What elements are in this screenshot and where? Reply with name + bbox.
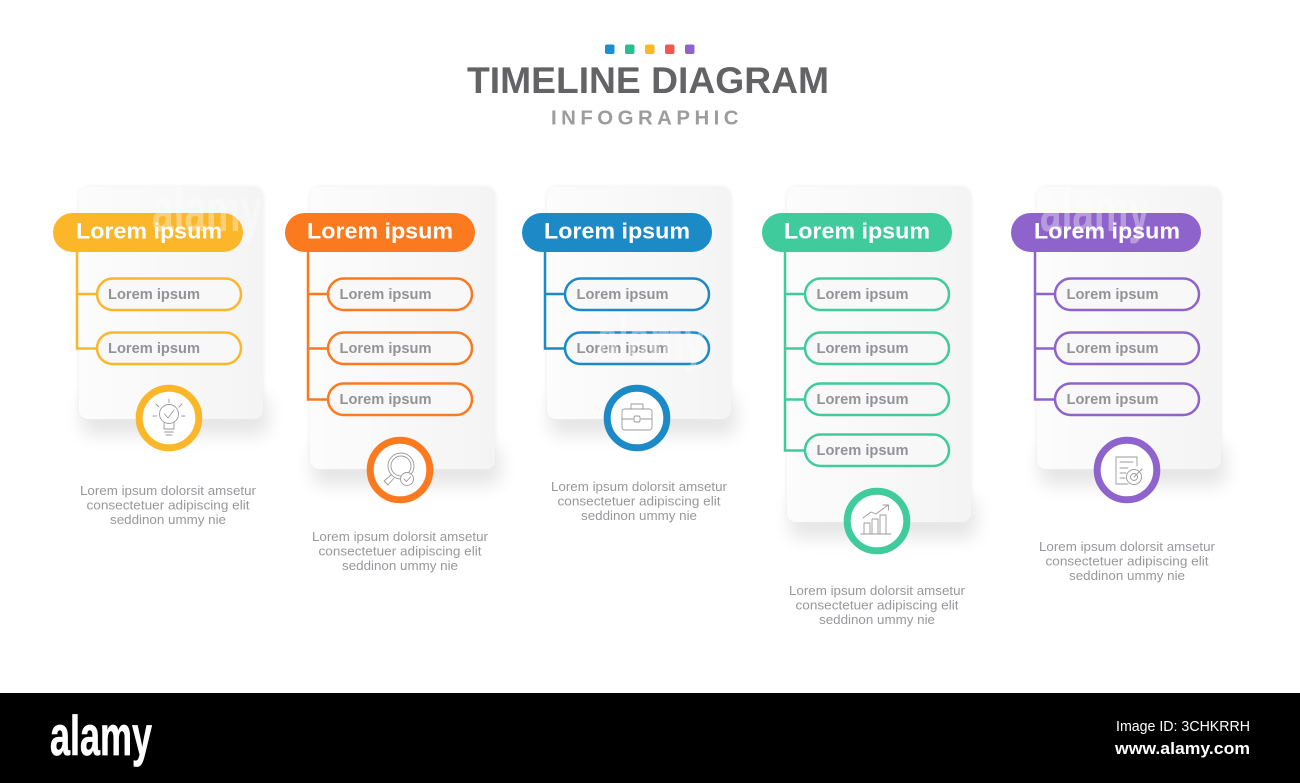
item 2.1: Lorem ipsum bbox=[340, 287, 432, 303]
item 5.1: Lorem ipsum bbox=[1066, 287, 1158, 303]
description 1: Lorem ipsum dolorsit amsetur bbox=[80, 484, 256, 498]
description 3: Lorem ipsum dolorsit amsetur bbox=[551, 480, 727, 494]
description 2: Lorem ipsum dolorsit amsetur bbox=[312, 530, 488, 544]
item 4.4: Lorem ipsum bbox=[816, 443, 908, 459]
header pill 2 bbox=[285, 213, 475, 252]
description 4 bbox=[789, 584, 965, 627]
connector 1 bbox=[77, 245, 98, 348]
description 3 bbox=[551, 480, 727, 523]
description 2 bbox=[312, 530, 488, 573]
icon: briefcase bbox=[607, 388, 667, 448]
header pill 4 bbox=[762, 213, 952, 252]
item 1.1: Lorem ipsum bbox=[108, 287, 200, 303]
panel: step 2 orange bbox=[285, 187, 500, 573]
item 4.3: Lorem ipsum bbox=[816, 392, 908, 408]
icon: growth chart bbox=[847, 491, 907, 551]
footer logo: alamy bbox=[50, 704, 152, 767]
card 5 bbox=[1037, 187, 1226, 485]
header pill 1 bbox=[53, 213, 243, 252]
connector 5 bbox=[1035, 245, 1056, 400]
connector 2 bbox=[308, 245, 329, 400]
header pill 1: Lorem ipsum bbox=[76, 218, 222, 244]
item 4.2 bbox=[805, 332, 949, 364]
description 5: consectetuer adipiscing elit bbox=[1046, 554, 1209, 568]
item 4.3 bbox=[805, 384, 949, 415]
connector 3 bbox=[545, 245, 566, 348]
image id: Image ID: 3CHKRRH bbox=[1116, 718, 1250, 735]
watermarks: alamy bbox=[597, 306, 705, 373]
item 1.1 bbox=[97, 278, 241, 310]
description 1: consectetuer adipiscing elit bbox=[86, 498, 250, 512]
description 1: seddinon ummy nie bbox=[110, 513, 226, 527]
panel: step 3 blue bbox=[522, 187, 736, 523]
description 4: seddinon ummy nie bbox=[819, 613, 935, 627]
description 3: seddinon ummy nie bbox=[581, 509, 697, 523]
item 1.2: Lorem ipsum bbox=[108, 341, 200, 357]
header dots bbox=[605, 44, 694, 54]
icon: light bulb bbox=[139, 388, 199, 448]
item 1.2 bbox=[97, 332, 241, 364]
title: TIMELINE DIAGRAM bbox=[467, 60, 829, 101]
item 3.2 bbox=[565, 332, 709, 364]
header pill 5: Lorem ipsum bbox=[1034, 218, 1180, 244]
header pill 4: Lorem ipsum bbox=[784, 218, 930, 244]
icon: checklist with target bbox=[1097, 440, 1157, 500]
header pill 5 bbox=[1011, 213, 1201, 252]
watermarks bbox=[152, 177, 1150, 373]
item 3.2: Lorem ipsum bbox=[576, 341, 668, 357]
panel: step 1 yellow bbox=[53, 187, 268, 527]
connector 4 bbox=[785, 245, 806, 450]
card 4 bbox=[787, 187, 976, 538]
description 2: consectetuer adipiscing elit bbox=[318, 544, 482, 558]
item 5.1 bbox=[1055, 278, 1199, 310]
item 5.3 bbox=[1055, 384, 1199, 415]
description 5 bbox=[1039, 540, 1215, 583]
description 5: Lorem ipsum dolorsit amsetur bbox=[1039, 540, 1215, 554]
panel: step 4 green bbox=[762, 187, 976, 627]
description 3: consectetuer adipiscing elit bbox=[558, 494, 721, 508]
panel: step 5 purple bbox=[1011, 187, 1226, 583]
card 3 bbox=[547, 187, 736, 435]
header pill 3: Lorem ipsum bbox=[544, 218, 690, 244]
description 4: Lorem ipsum dolorsit amsetur bbox=[789, 584, 965, 598]
subtitle: INFOGRAPHIC bbox=[551, 106, 743, 130]
icon: magnifier bbox=[370, 440, 430, 500]
item 4.4 bbox=[805, 434, 949, 466]
watermarks: alamy bbox=[1040, 177, 1150, 244]
item 2.3 bbox=[328, 384, 472, 415]
item 5.3: Lorem ipsum bbox=[1066, 392, 1158, 408]
description 1 bbox=[80, 484, 256, 527]
card 1 bbox=[79, 187, 268, 435]
description 2: seddinon ummy nie bbox=[342, 559, 458, 573]
item 4.1: Lorem ipsum bbox=[816, 287, 908, 303]
card 2 bbox=[310, 187, 500, 485]
item 4.1 bbox=[805, 278, 949, 310]
item 5.2: Lorem ipsum bbox=[1066, 341, 1158, 357]
description 4: consectetuer adipiscing elit bbox=[796, 598, 959, 612]
item 2.3: Lorem ipsum bbox=[340, 392, 432, 408]
footer bar bbox=[0, 693, 1300, 783]
item 4.2: Lorem ipsum bbox=[816, 341, 908, 357]
item 2.1 bbox=[328, 278, 472, 310]
watermarks: alamy bbox=[152, 177, 262, 244]
item 5.2 bbox=[1055, 332, 1199, 364]
item 3.1: Lorem ipsum bbox=[576, 287, 668, 303]
item 2.2: Lorem ipsum bbox=[340, 341, 432, 357]
description 5: seddinon ummy nie bbox=[1069, 569, 1185, 583]
website: www.alamy.com bbox=[1114, 739, 1250, 758]
header pill 2: Lorem ipsum bbox=[307, 218, 453, 244]
header pill 3 bbox=[522, 213, 712, 252]
item 2.2 bbox=[328, 332, 472, 364]
item 3.1 bbox=[565, 278, 709, 310]
